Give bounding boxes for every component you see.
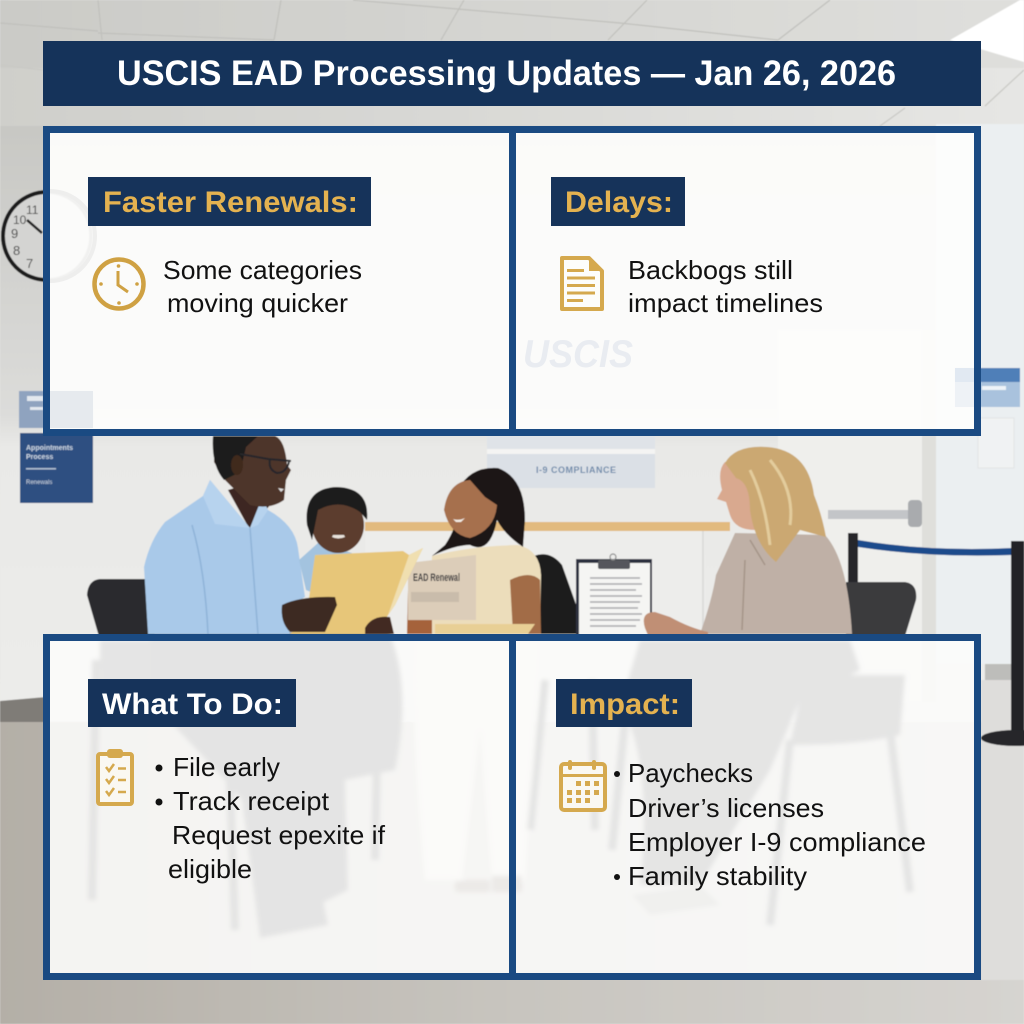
service counter xyxy=(365,522,730,706)
wall signs left: Renewals xyxy=(26,480,52,486)
baseboard xyxy=(0,664,1024,722)
heading xyxy=(88,679,296,727)
panel: what to do xyxy=(88,679,386,884)
heading: Faster Renewals: xyxy=(103,186,358,219)
wall clock: 7 xyxy=(26,256,33,271)
stanchions xyxy=(848,533,1024,746)
text block: Backbogs still xyxy=(628,255,793,285)
floor xyxy=(0,722,1024,1024)
bullet list: Paychecks xyxy=(628,758,753,788)
heading xyxy=(556,679,692,727)
icon: clock xyxy=(94,260,144,308)
ghosted lower scene: chairs and legs xyxy=(92,634,910,938)
icon: calendar xyxy=(561,760,605,810)
bullet list: Driver’s licenses xyxy=(628,793,824,823)
panel: delays xyxy=(551,177,823,318)
right wall xyxy=(936,124,1024,664)
text block: moving quicker xyxy=(167,288,348,318)
yellow folder xyxy=(282,548,423,634)
heading: Delays: xyxy=(565,186,673,219)
man in blue shirt xyxy=(144,436,305,634)
bullet list: Family stability xyxy=(628,861,807,891)
icon: clipboard checklist xyxy=(98,749,132,804)
wall signs left xyxy=(19,391,93,503)
girl xyxy=(407,468,578,634)
I-9 compliance wall sign xyxy=(487,436,655,488)
wall clock: 10 xyxy=(13,213,27,227)
bullet list xyxy=(614,758,926,891)
woman xyxy=(644,447,852,640)
title banner: USCIS EAD Processing Updates — Jan 26, 2026 xyxy=(117,54,896,93)
panel: impact xyxy=(556,679,926,891)
wall clock: 11 xyxy=(26,203,39,217)
clipboard xyxy=(576,554,652,639)
door xyxy=(778,330,936,702)
title banner xyxy=(43,41,981,106)
bullet list xyxy=(156,752,386,884)
text block xyxy=(628,255,823,318)
right chair xyxy=(846,582,916,636)
text block: Some categories xyxy=(163,255,362,285)
wall clock xyxy=(3,192,91,280)
text block: impact timelines xyxy=(628,288,823,318)
wall clock: 9 xyxy=(11,226,18,241)
wall clock: 8 xyxy=(13,243,20,258)
bullet list: eligible xyxy=(168,854,252,884)
bullet list: Request epexite if xyxy=(172,820,386,850)
bullet list: File early xyxy=(173,752,280,782)
faded wall clock and sign ghost xyxy=(50,191,974,428)
wall signs left: Appointments xyxy=(26,445,73,452)
ceiling xyxy=(0,0,1024,128)
icon: document xyxy=(562,258,602,309)
panel: faster renewals xyxy=(88,177,371,318)
heading: Impact: xyxy=(570,688,680,721)
text block xyxy=(163,255,362,318)
bullet list: Employer I-9 compliance xyxy=(628,827,926,857)
back wall xyxy=(0,126,1024,701)
child xyxy=(299,487,367,600)
heading xyxy=(88,177,371,226)
bullet list: Track receipt xyxy=(173,786,330,816)
wall signs left: Process xyxy=(26,454,53,461)
faded USCIS wall lettering: USCIS xyxy=(523,333,633,376)
heading xyxy=(551,177,685,226)
left chair xyxy=(87,579,155,640)
panel: translucent cards xyxy=(46,130,978,976)
heading: What To Do: xyxy=(102,688,283,721)
girl: EAD Renewal xyxy=(413,572,460,584)
I-9 compliance wall sign: I-9 COMPLIANCE xyxy=(536,465,617,475)
